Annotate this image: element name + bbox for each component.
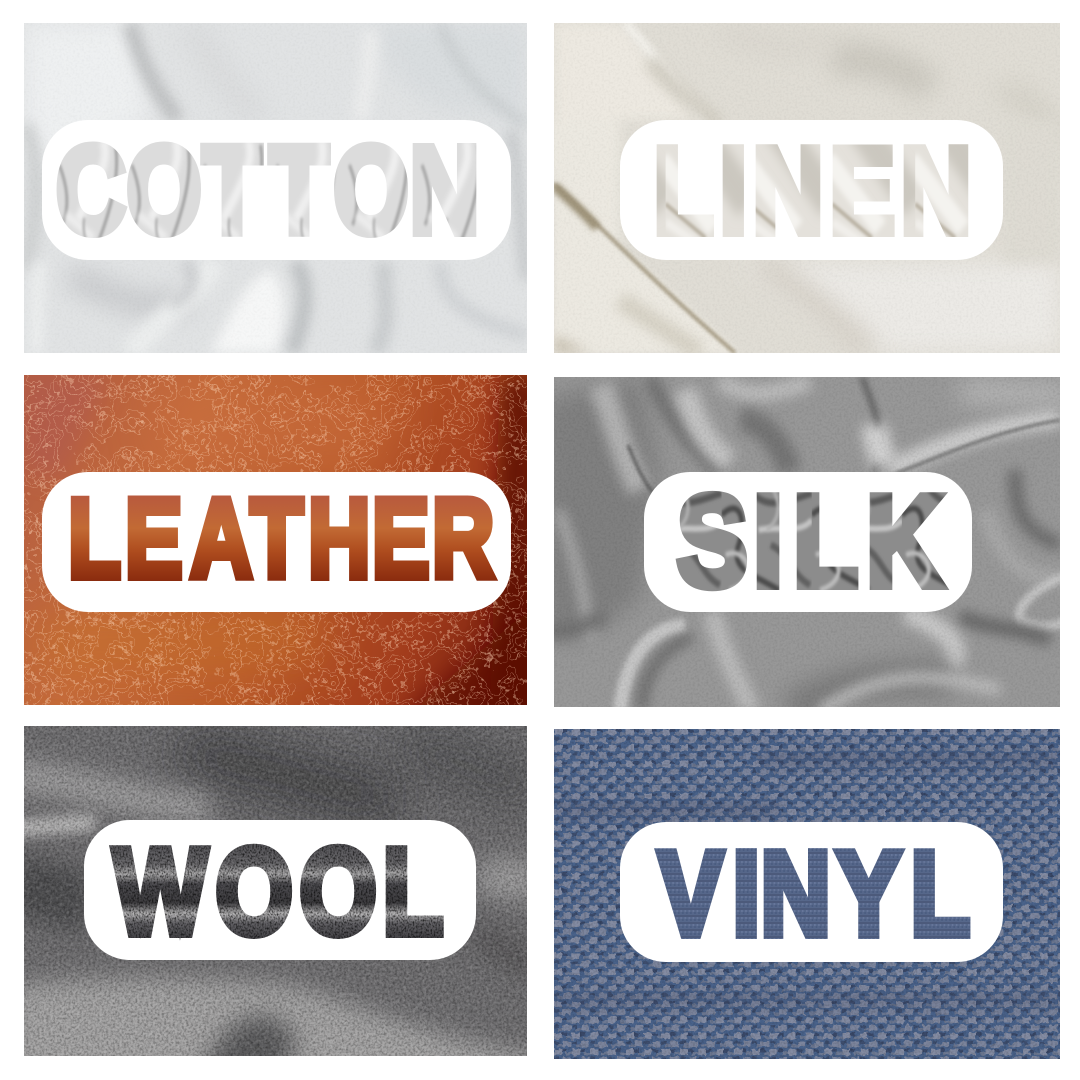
label text: silk: SILK — [677, 468, 943, 613]
panel: leather — [24, 375, 540, 720]
texture: blue woven vinyl — [554, 729, 1060, 1059]
texture: tan leather grain — [24, 375, 540, 720]
texture: cream linen folds — [554, 23, 1060, 353]
label pill: silk — [644, 472, 972, 612]
label pill: wool — [84, 820, 476, 960]
panel: cotton — [24, 23, 527, 353]
panel: silk — [540, 377, 1070, 712]
panel: wool — [24, 726, 527, 1056]
texture: white cotton folds — [24, 23, 527, 353]
label pill: cotton — [42, 120, 511, 260]
label pill: linen — [620, 120, 1003, 260]
label text: cotton: COTTON — [56, 122, 479, 259]
label text: leather: LEATHER — [68, 477, 494, 602]
label text: linen: LINEN — [654, 123, 971, 259]
panel: vinyl — [554, 729, 1060, 1059]
label text: wool: WOOL — [114, 824, 443, 960]
texture: grey wool knit — [24, 726, 527, 1056]
label pill: vinyl — [620, 822, 1003, 962]
label pill: leather — [42, 472, 511, 612]
label text: vinyl: VINYL — [659, 827, 970, 960]
panel: linen — [554, 23, 1060, 353]
texture: grey silk folds — [540, 377, 1070, 712]
